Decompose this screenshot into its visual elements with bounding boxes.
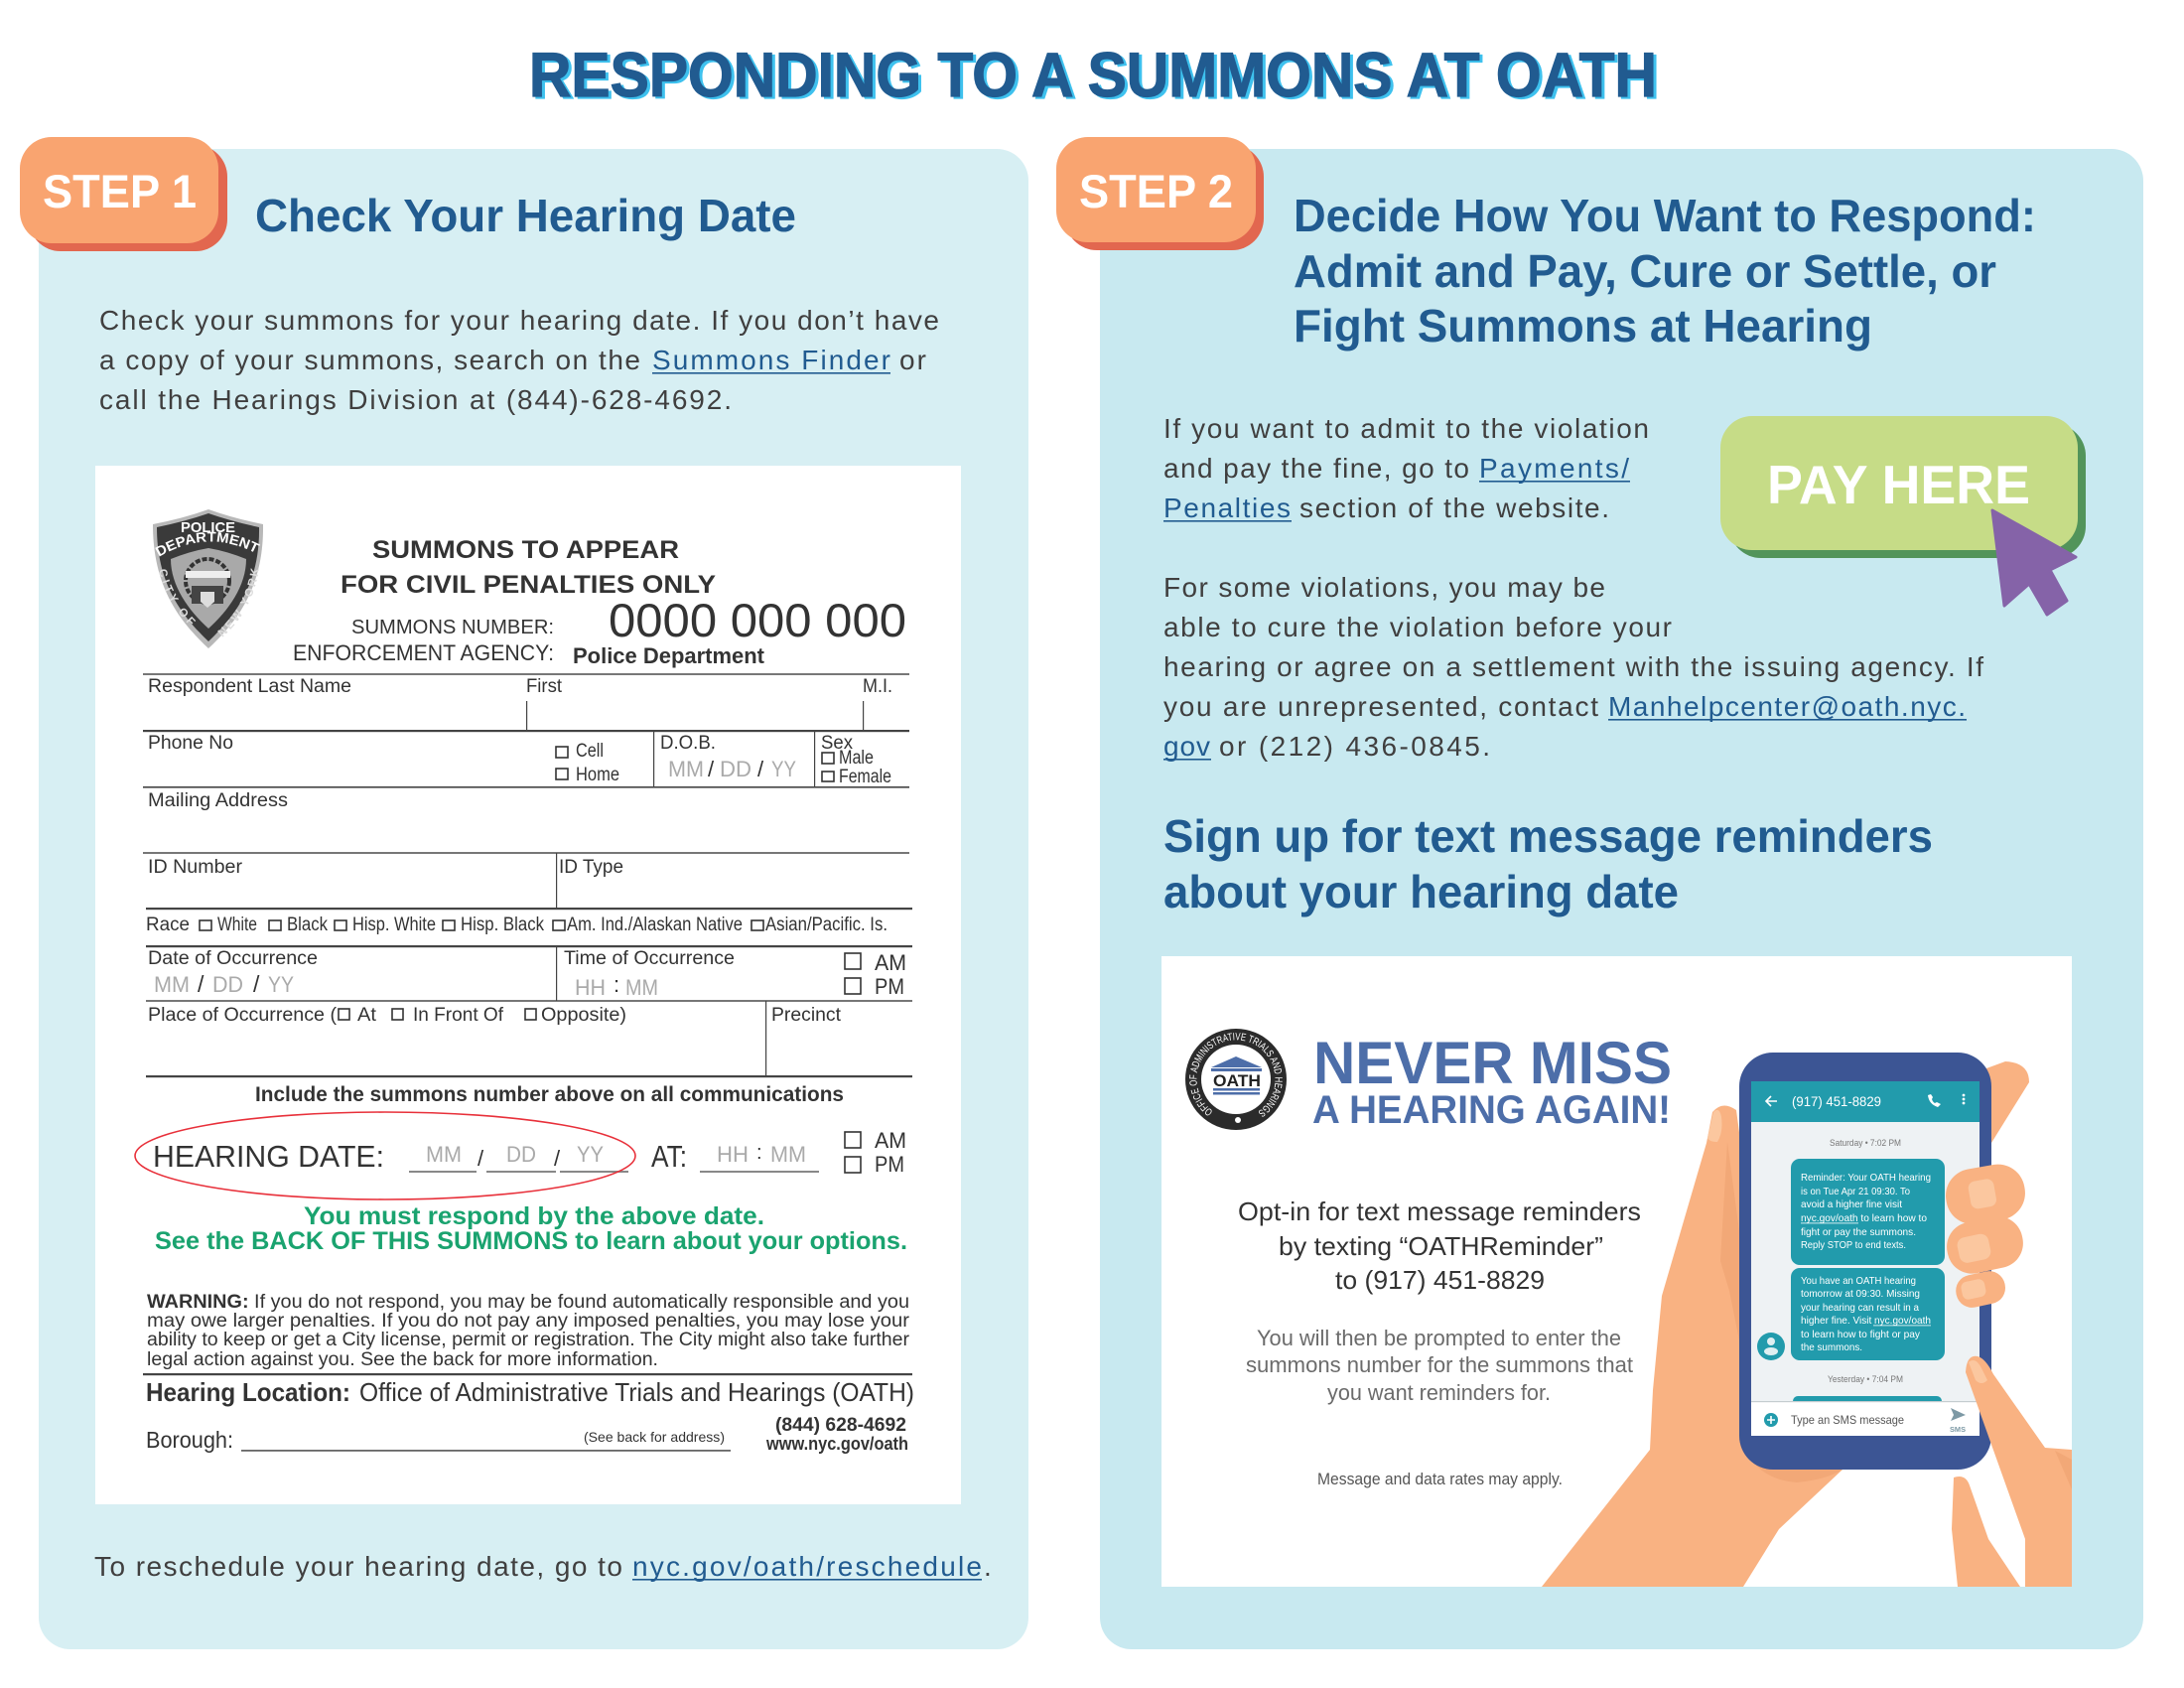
message input bar: Type an SMS message [1791, 1413, 1904, 1427]
palm and thumb [1542, 1105, 1843, 1587]
hearing location: www.nyc.gov/oath [765, 1434, 908, 1454]
message bubble 2: the summons. [1801, 1341, 1862, 1353]
summons number: SUMMONS NUMBER: [351, 617, 554, 638]
hearing date row [135, 1112, 906, 1199]
panel: step 2 [1056, 137, 2143, 1649]
occurrence row: MM [154, 972, 190, 997]
pay here button: PAY HERE [1767, 454, 2030, 515]
address and id rows [148, 790, 623, 878]
green notice: You must respond by the above date. [304, 1202, 764, 1230]
message bubble 1: Reminder: Your OATH hearing [1801, 1172, 1931, 1184]
title: RESPONDING TO A SUMMONS AT OATH [529, 41, 1657, 110]
prompt text: you want reminders for. [1327, 1380, 1551, 1405]
hearing date row: MM [770, 1142, 806, 1167]
warning text: ability to keep or get a City license, permit or registration. The City might also take further [147, 1330, 910, 1350]
icon: police department badge: DEPARTMENT [155, 532, 260, 556]
icon: police department badge: POLICE [181, 519, 235, 536]
message bubble 1: is on Tue Apr 21 09:30. To [1801, 1186, 1910, 1197]
prompt text: summons number for the summons that [1246, 1352, 1633, 1377]
green notice [155, 1202, 907, 1255]
message bubble 1 [1791, 1159, 1945, 1265]
race row: Hisp. Black [461, 914, 544, 935]
heading: check your hearing date: Check Your Hearing Date [255, 190, 796, 241]
phone [1739, 1053, 1991, 1470]
phone header [1751, 1081, 1979, 1122]
address and id rows: ID Number [148, 857, 243, 878]
phone row: MM [668, 757, 704, 781]
green notice: See the BACK OF THIS SUMMONS to learn about your options. [155, 1227, 907, 1255]
summons number: 0000 000 000 [609, 594, 906, 646]
place row: Opposite) [541, 1005, 626, 1026]
admit and pay text: section of the website. [1299, 492, 1609, 523]
message bubble 1: Reply STOP to end texts. [1801, 1239, 1906, 1251]
message bubble 2: higher fine. Visit nyc.gov/oath [1801, 1315, 1931, 1327]
cure or settle text: able to cure the violation before your [1163, 612, 1672, 642]
second timestamp: Yesterday • 7:04 PM [1828, 1374, 1903, 1385]
hearing location: Borough: [146, 1427, 233, 1453]
intro text: or [899, 345, 926, 375]
step 2 badge: STEP 2 [1079, 165, 1233, 217]
cure or settle text: Manhelpcenter@oath.nyc. [1608, 691, 1966, 722]
rates disclaimer: Message and data rates may apply. [1317, 1471, 1563, 1488]
phone row: Male [839, 748, 874, 769]
cure or settle text [1163, 572, 1983, 762]
hearing location [146, 1377, 914, 1454]
cure or settle text: you are unrepresented, contact [1163, 691, 1598, 722]
phone row: Female [839, 767, 891, 787]
phone row: / [708, 757, 715, 781]
panel: step 1 [20, 137, 1028, 1649]
reschedule text: nyc.gov/oath/reschedule [632, 1551, 982, 1582]
palm shadow [1739, 1435, 1843, 1482]
admit and pay text: If you want to admit to the violation [1163, 413, 1649, 444]
race row: White [217, 914, 257, 935]
occurrence row: Date of Occurrence [148, 948, 318, 969]
phone row: DD [720, 757, 751, 781]
message bubble 1: nyc.gov/oath to learn how to [1801, 1212, 1927, 1224]
hearing location: (See back for address) [584, 1429, 725, 1445]
message input bar: SMS [1950, 1425, 1966, 1434]
intro text: call the Hearings Division at (844)-628-4692. [99, 384, 732, 415]
icon: police department badge [153, 509, 263, 648]
heading: text message reminders [1163, 810, 1933, 917]
place row: At [357, 1005, 377, 1026]
race row [146, 914, 887, 935]
hearing date row: / [554, 1146, 561, 1171]
heading: decide how to respond [1294, 190, 2036, 352]
reschedule text [94, 1551, 992, 1582]
hearing date highlight ellipse [135, 1112, 635, 1199]
message bubble 1: avoid a higher fine visit [1801, 1198, 1902, 1210]
summons form [95, 466, 961, 1504]
right thumb [1952, 1477, 2020, 1587]
phone row: Sex [821, 733, 853, 754]
race row: Am. Ind./Alaskan Native [567, 914, 743, 935]
warning text: may owe larger penalties. If you do not pay any imposed penalties, you may lose your [147, 1311, 910, 1332]
flyer headline: NEVER MISS [1313, 1030, 1672, 1096]
step 1 badge [20, 137, 227, 251]
message bubble 2: You have an OATH hearing [1801, 1275, 1916, 1287]
place row: In Front Of [413, 1005, 504, 1026]
phone row: / [757, 757, 764, 781]
occurrence row: : [614, 972, 619, 997]
hearing date row: AT: [651, 1139, 687, 1174]
occurrence row: YY [268, 972, 294, 997]
occurrence row: PM [875, 974, 904, 999]
place row [148, 1005, 842, 1026]
cure or settle text: hearing or agree on a settlement with the issuing agency. If [1163, 651, 1983, 682]
form title: FOR CIVIL PENALTIES ONLY [341, 571, 716, 599]
warning text: legal action against you. See the back for more information. [147, 1349, 658, 1370]
phone header: (917) 451-8829 [1792, 1094, 1881, 1109]
intro text [99, 305, 939, 415]
occurrence row: DD [212, 972, 243, 997]
heading: decide how to respond: Fight Summons at Hearing [1294, 300, 1872, 352]
phone row: D.O.B. [660, 733, 716, 754]
opt-in instructions [1238, 1196, 1641, 1295]
respondent name row [148, 676, 892, 697]
flyer headline [1312, 1030, 1672, 1132]
hearing date row: AM [875, 1128, 906, 1153]
summons number: Police Department [573, 643, 765, 668]
message bubble 2 [1791, 1268, 1945, 1360]
step 2 badge [1056, 137, 1264, 250]
heading: text message reminders: Sign up for text message reminders [1163, 810, 1933, 862]
occurrence row: HH [575, 975, 606, 1000]
admit and pay text: Payments/ [1479, 453, 1629, 484]
respondent name row: Respondent Last Name [148, 676, 351, 697]
intro text: a copy of your summons, search on the [99, 345, 640, 375]
form rules [143, 673, 912, 1375]
message bubble 2: tomorrow at 09:30. Missing [1801, 1288, 1920, 1300]
heading: decide how to respond: Admit and Pay, Cure or Settle, or [1294, 245, 1996, 297]
phone row: Cell [576, 741, 604, 762]
pay here button [1720, 416, 2086, 615]
hearing date row: HH [717, 1142, 749, 1167]
message input bar [1751, 1401, 1979, 1436]
race row: Race [146, 914, 190, 935]
address and id rows: Mailing Address [148, 790, 288, 811]
phone row [148, 733, 891, 787]
hearing date row: PM [875, 1152, 904, 1177]
step 1 badge: STEP 1 [43, 165, 197, 217]
reschedule text: . [984, 1551, 992, 1582]
illustration: hand holding phone [1542, 1053, 2072, 1587]
heading: text message reminders: about your hearing date [1163, 866, 1679, 917]
occurrence row: MM [625, 975, 658, 1000]
race row: Asian/Pacific. Is. [765, 914, 887, 935]
message bubble 2: to learn how to fight or pay [1801, 1329, 1921, 1340]
warning text [147, 1292, 910, 1370]
occurrence row: Time of Occurrence [564, 948, 735, 969]
phone row: Home [576, 765, 619, 785]
prompt text: You will then be prompted to enter the [1257, 1326, 1621, 1350]
pointing finger and hand [1952, 1356, 2072, 1587]
hearing location: Hearing Location: [146, 1377, 350, 1407]
hearing date row: DD [506, 1142, 536, 1167]
opt-in instructions: to (917) 451-8829 [1335, 1265, 1545, 1295]
message bubble 3 [1793, 1396, 1942, 1406]
icon: oath seal: OATH [1213, 1071, 1261, 1090]
thumb nail [1707, 1110, 1721, 1142]
race row: Hisp. White [352, 914, 436, 935]
summons number: ENFORCEMENT AGENCY: [293, 640, 554, 665]
race row: Black [287, 914, 328, 935]
hearing date row: YY [577, 1142, 604, 1167]
respondent name row: First [526, 676, 563, 697]
phone row: YY [771, 757, 796, 781]
respondent name row: M.I. [863, 676, 892, 697]
icon: oath seal: OFFICE OF ADMINISTRATIVE TRIALS AND HEARINGS [1189, 1033, 1283, 1117]
form title [341, 536, 716, 599]
place row: Precinct [771, 1005, 842, 1026]
form title: SUMMONS TO APPEAR [372, 536, 679, 564]
cure or settle text: or (212) 436-0845. [1219, 731, 1490, 762]
hearing location: (844) 628-4692 [775, 1415, 906, 1436]
message bubble 2: your hearing can result in a [1801, 1302, 1919, 1314]
occurrence row: AM [875, 950, 906, 975]
prompt text [1246, 1326, 1633, 1405]
cure or settle text: For some violations, you may be [1163, 572, 1605, 603]
icon: police department badge: NEW YORK [217, 568, 259, 637]
heading: decide how to respond: Decide How You Want to Respond: [1294, 190, 2036, 241]
message bubble 1: fight or pay the summons. [1801, 1226, 1916, 1238]
icon: cursor arrow [1992, 510, 2076, 615]
phone row: Phone No [148, 733, 233, 754]
hearing date row: / [478, 1146, 484, 1171]
sender avatar [1757, 1333, 1785, 1360]
icon: police department badge: CITY OF [159, 569, 197, 624]
admit and pay text: Penalties [1163, 492, 1291, 523]
message timestamp: Saturday • 7:02 PM [1830, 1138, 1901, 1149]
include summons number notice: Include the summons number above on all communications [255, 1083, 844, 1106]
warning text: WARNING: If you do not respond, you may be found automatically responsible and you [147, 1292, 909, 1313]
hearing location: Office of Administrative Trials and Hearings (OATH) [359, 1377, 914, 1407]
reminder flyer [1161, 956, 2072, 1587]
admit and pay text [1163, 413, 1649, 523]
occurrence row: / [253, 971, 260, 997]
reschedule text: To reschedule your hearing date, go to [94, 1551, 622, 1582]
occurrence row: / [198, 971, 205, 997]
fingers gripping phone [1942, 1160, 2029, 1311]
summons number [293, 594, 906, 668]
place row: Place of Occurrence ( [148, 1005, 338, 1026]
cure or settle text: gov [1163, 731, 1210, 762]
hearing date row: MM [426, 1142, 462, 1167]
back finger [1976, 1061, 2029, 1152]
hearing date row: : [756, 1142, 762, 1164]
thumb shading [1720, 1142, 1739, 1340]
hearing date row: HEARING DATE: [153, 1139, 384, 1174]
opt-in instructions: Opt-in for text message reminders [1238, 1196, 1641, 1226]
flyer headline: A HEARING AGAIN! [1312, 1088, 1671, 1132]
admit and pay text: and pay the fine, go to [1163, 453, 1469, 484]
address and id rows: ID Type [559, 857, 623, 878]
opt-in instructions: by texting “OATHReminder” [1279, 1231, 1603, 1261]
occurrence row [148, 948, 906, 1000]
intro text: Summons Finder [652, 345, 890, 375]
intro text: Check your summons for your hearing date. If you don’t have [99, 305, 939, 336]
